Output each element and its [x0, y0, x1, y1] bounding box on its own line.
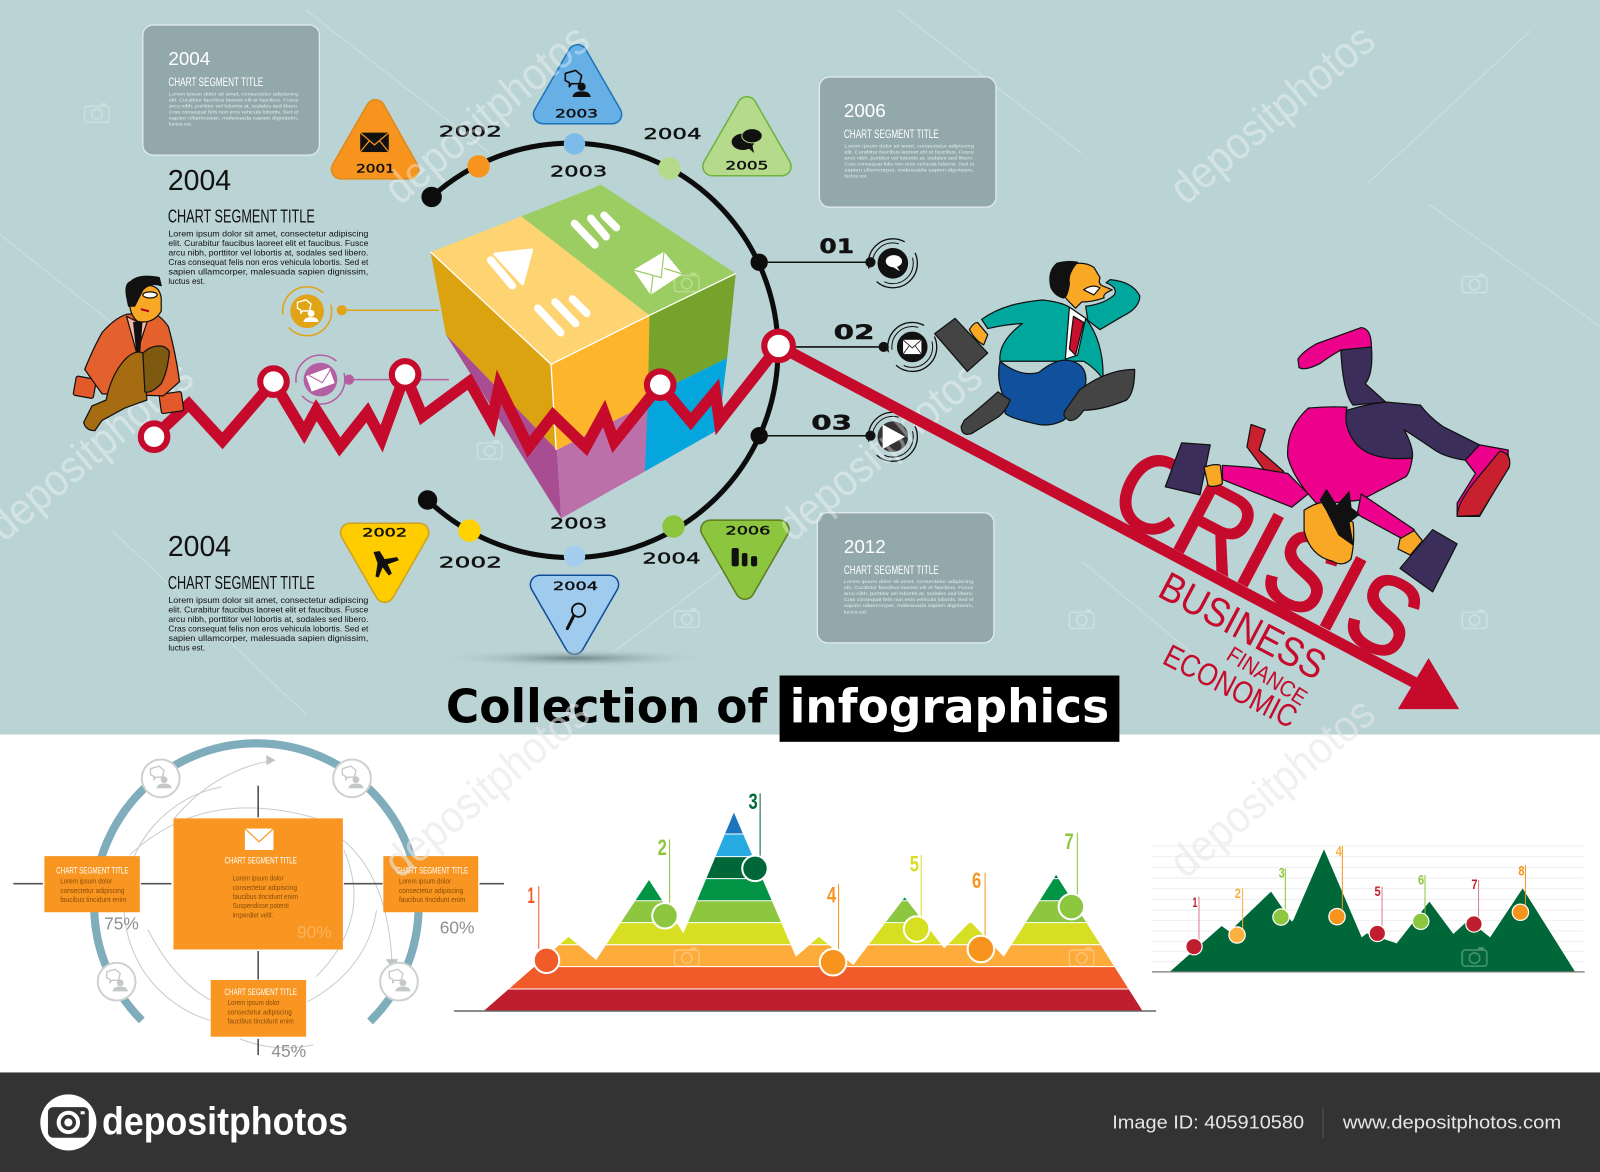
- pin 3: [1273, 866, 1289, 925]
- panel: grey info box 2006: luctus est.: [844, 174, 868, 180]
- red trend line with arrow: [141, 332, 1459, 709]
- center orange card: consectetur adipiscing: [233, 884, 297, 892]
- icon: person node bottom right: [380, 963, 418, 1001]
- icon: blue triangle 2003: 2003: [555, 107, 598, 120]
- pin 1: 1: [528, 883, 535, 908]
- left orange card: CHART SEGMENT TITLE: [56, 865, 129, 875]
- percentage labels: 60%: [440, 918, 474, 938]
- 3D cube: [431, 185, 736, 518]
- year labels on ring: 2003: [550, 163, 607, 181]
- panel: grey info box 2004: elit. Curabitur faucibus laoreet elit et faucibus. Fusce: [169, 97, 299, 103]
- CRISIS lettering: CRISIS: [1094, 423, 1442, 685]
- bottom orange card: CHART SEGMENT TITLE: [224, 987, 297, 997]
- panel: grey info box 2004: sapien ullamcorper, malesuada sapien dignissim,: [169, 115, 298, 121]
- pin 5: [904, 851, 929, 942]
- character: worried businessman left: [73, 276, 184, 431]
- BUSINESS FINANCE ECONOMIC lettering: BUSINESS: [1152, 563, 1334, 689]
- pin 3: 3: [1279, 866, 1285, 882]
- footer bar: [0, 1072, 1600, 1172]
- pin 1: 1: [1192, 895, 1197, 911]
- right orange card: [383, 856, 478, 912]
- icon: person node top left: [142, 759, 180, 797]
- pin 5: [1369, 884, 1386, 942]
- panel: grey info box 2006: elit. Curabitur faucibus laoreet elit et faucibus. Fusce: [844, 149, 974, 155]
- year labels on ring: 2003: [550, 515, 607, 533]
- bottom orange card: faucibus tincidunt enim: [228, 1017, 294, 1025]
- panel: grey info box 2004: CHART SEGMENT TITLE: [168, 75, 263, 89]
- icon: yellow triangle 2002: [350, 527, 419, 593]
- center orange card: imperdiet velit.: [233, 911, 273, 919]
- panel: grey info box 2012: arcu nibh, porttitor vel lobortis at, sodales sed libero.: [844, 591, 973, 597]
- text block: 2004 upper: Lorem ipsum dolor sit amet, consectetur adipiscing: [168, 230, 368, 239]
- pin 7: 7: [1064, 829, 1074, 854]
- panel: circular segment chart: [13, 743, 504, 1061]
- bottom orange card: consectetur adipiscing: [228, 1008, 292, 1016]
- watermark text: [0, 13, 1384, 551]
- icon: light blue triangle 2004: 2004: [553, 580, 598, 593]
- text block: 2004 upper: sapien ullamcorper, malesuada sapien dignissim,: [168, 268, 368, 277]
- panel: grey info box 2004: 2004: [168, 48, 210, 69]
- chart: green mountain: [1152, 844, 1585, 972]
- text block: 2004 upper: elit. Curabitur faucibus laoreet elit et faucibus. Fusce: [168, 239, 369, 248]
- percentage labels: 75%: [104, 914, 139, 934]
- panel: grey info box 2006: CHART SEGMENT TITLE: [844, 127, 939, 141]
- title: [446, 676, 1119, 742]
- text block: 2004 upper: [168, 165, 369, 286]
- watermark text on white panel: depositphotos: [374, 687, 599, 887]
- panel: grey info box 2012: 2012: [844, 536, 886, 557]
- pin 4: [820, 883, 846, 976]
- panel: grey info box 2004: arcu nibh, porttitor vel lobortis at, sodales sed libero.: [169, 103, 298, 109]
- text block: 2004 upper: CHART SEGMENT TITLE: [168, 206, 315, 226]
- pin 3: [742, 789, 768, 881]
- pin 4: 4: [827, 883, 837, 908]
- panel: grey info box 2004: [143, 25, 319, 155]
- icon: light blue triangle 2004: [540, 580, 609, 645]
- pin 8: 8: [1518, 864, 1525, 880]
- watermark camera icons: [85, 103, 1487, 966]
- panel: grey info box 2004: luctus est.: [169, 122, 192, 128]
- text block: 2004 lower: sapien ullamcorper, malesuada sapien dignissim,: [168, 634, 368, 643]
- character: panicked businessman running: [935, 261, 1140, 434]
- pin 2: [1229, 886, 1245, 943]
- pin 4: [1329, 844, 1345, 925]
- icon: orange triangle 2001: 2001: [356, 162, 395, 175]
- center orange card: Suspendisse potenti: [233, 902, 289, 910]
- icon: orange triangle 2001: [341, 109, 409, 175]
- text block: 2004 lower: elit. Curabitur faucibus laoreet elit et faucibus. Fusce: [168, 606, 369, 615]
- text block: 2004 upper: luctus est.: [168, 277, 205, 286]
- panel: grey info box 2006: arcu nibh, porttitor vel lobortis at, sodales sed libero.: [844, 155, 974, 161]
- icon: green triangle 2006: 2006: [726, 525, 770, 538]
- panel: grey info box 2004: Lorem ipsum dolor sit amet, consectetur adipiscing: [169, 91, 299, 97]
- pin 2: 2: [658, 835, 667, 860]
- timeline ring with dots: [418, 133, 778, 567]
- pin 3: 3: [748, 789, 758, 814]
- text block: 2004 upper: 2004: [168, 165, 231, 197]
- pin 7: [1466, 877, 1482, 932]
- icon: green triangle 2006: [710, 525, 780, 590]
- pin 2: [652, 835, 678, 928]
- panel: grey info box 2006: 2006: [844, 100, 886, 121]
- text block: 2004 lower: arcu nibh, porttitor vel lobortis at, sodales sed libero.: [168, 615, 368, 624]
- percentage labels: [104, 914, 474, 1061]
- center orange card: 90%: [297, 922, 332, 942]
- icon: person node top right: [333, 759, 371, 797]
- panel: grey info box 2012: Cras consequat felis non eros vehicula lobortis. Sed et: [844, 597, 974, 603]
- pin 6: 6: [972, 868, 981, 893]
- panel: grey info box 2012: CHART SEGMENT TITLE: [844, 563, 939, 577]
- left orange card: consectetur adipiscing: [60, 887, 125, 895]
- pin 7: [1059, 829, 1084, 919]
- icon: blue triangle 2003: [543, 54, 612, 120]
- watermark text on white panel: depositphotos: [1159, 687, 1384, 887]
- pin 4: 4: [1336, 844, 1342, 860]
- connector 02: [791, 321, 937, 371]
- website: www.depositphotos.com: [1342, 1112, 1561, 1133]
- connector 01: 01: [819, 235, 854, 258]
- connector 01: [759, 235, 917, 288]
- year labels on ring: 2004: [643, 125, 702, 143]
- year labels on ring: 2002: [439, 123, 502, 141]
- watermark text: depositphotos: [374, 13, 599, 214]
- center orange card: CHART SEGMENT TITLE: [224, 855, 297, 865]
- text block: 2004 lower: 2004: [168, 531, 231, 563]
- image id: Image ID: 405910580: [1112, 1112, 1304, 1133]
- panel: grey info box 2006: Lorem ipsum dolor sit amet, consectetur adipiscing: [844, 143, 974, 149]
- pin 6: [1413, 873, 1429, 929]
- right orange card: consectetur adipiscing: [399, 887, 463, 895]
- shadow under triangle: [437, 649, 712, 667]
- panel: grey info box 2006: [819, 77, 996, 207]
- pin 6: [968, 868, 994, 962]
- chart: mountain layered: [449, 789, 1163, 1011]
- left orange card: Lorem ipsum dolor: [60, 878, 113, 886]
- character: falling businessman: [1165, 328, 1510, 592]
- watermark text on white panel: [374, 687, 1384, 887]
- year labels on ring: [439, 123, 702, 571]
- title: Collection of: [446, 679, 768, 733]
- icon: green triangle 2005: [712, 106, 782, 172]
- right orange card: CHART SEGMENT TITLE: [396, 865, 468, 875]
- connector icon: gold person: [283, 287, 439, 336]
- panel: grey info box 2012: Lorem ipsum dolor sit amet, consectetur adipiscing: [844, 579, 974, 585]
- icon: yellow triangle 2002: 2002: [362, 527, 407, 540]
- logo wordmark: depositphotos: [102, 1101, 348, 1144]
- text block: 2004 lower: Cras consequat felis non eros vehicula lobortis. Sed et: [168, 625, 369, 634]
- text block: 2004 lower: Lorem ipsum dolor sit amet, consectetur adipiscing: [168, 596, 368, 605]
- pin 1: [1186, 895, 1202, 955]
- connector 02: 02: [834, 321, 874, 344]
- connector icon: purple envelope: [296, 355, 449, 404]
- panel: grey info box 2012: luctus est.: [844, 609, 867, 615]
- left orange card: faucibus tincidunt enim: [60, 896, 127, 904]
- pin 1: [528, 883, 559, 973]
- panel: grey info box 2006: Cras consequat felis non eros vehicula lobortis. Sed et: [844, 161, 975, 167]
- percentage labels: 45%: [271, 1041, 306, 1061]
- connector 03: 03: [811, 412, 852, 435]
- panel: grey info box 2012: elit. Curabitur faucibus laoreet elit et faucibus. Fusce: [844, 585, 974, 591]
- text block: 2004 upper: Cras consequat felis non eros vehicula lobortis. Sed et: [168, 258, 369, 267]
- year labels on ring: 2002: [439, 553, 502, 571]
- panel: grey info box 2006: sapien ullamcorper, malesuada sapien dignissim,: [844, 167, 974, 173]
- pin 2: 2: [1235, 886, 1241, 902]
- text block: 2004 lower: [168, 531, 369, 653]
- BUSINESS FINANCE ECONOMIC lettering: ECONOMIC: [1158, 637, 1303, 735]
- bottom orange card: [211, 980, 306, 1037]
- pin 5: 5: [910, 851, 919, 876]
- left orange card: [44, 856, 140, 912]
- center orange card: Lorem ipsum dolor: [233, 875, 284, 883]
- text block: 2004 lower: CHART SEGMENT TITLE: [168, 573, 315, 593]
- panel: grey info box 2012: sapien ullamcorper, malesuada sapien dignissim,: [844, 603, 973, 609]
- watermark text: depositphotos: [767, 350, 992, 551]
- pin 7: 7: [1471, 877, 1478, 893]
- pin 6: 6: [1418, 873, 1424, 889]
- logo camera: [40, 1094, 96, 1151]
- center orange card: faucibus tincidunt enim: [233, 893, 298, 901]
- title: infographics: [790, 679, 1109, 733]
- pin 8: [1512, 864, 1529, 920]
- connector 03: [759, 412, 917, 461]
- center orange card: [173, 818, 343, 949]
- year labels on ring: 2004: [642, 549, 701, 567]
- panel: grey info box 2012: [817, 513, 994, 643]
- pin 5: 5: [1374, 884, 1381, 900]
- right orange card: faucibus tincidunt enim: [399, 896, 465, 904]
- icon: green triangle 2005: 2005: [726, 159, 768, 172]
- watermark text: depositphotos: [1159, 13, 1384, 214]
- text block: 2004 lower: luctus est.: [168, 644, 205, 653]
- bottom orange card: Lorem ipsum dolor: [228, 999, 280, 1007]
- text block: 2004 upper: arcu nibh, porttitor vel lobortis at, sodales sed libero.: [168, 249, 368, 258]
- icon: person node bottom left: [98, 963, 136, 1001]
- BUSINESS FINANCE ECONOMIC lettering: FINANCE: [1222, 642, 1312, 710]
- panel: grey info box 2004: Cras consequat felis non eros vehicula lobortis. Sed et: [169, 109, 299, 115]
- right orange card: Lorem ipsum dolor: [399, 878, 452, 886]
